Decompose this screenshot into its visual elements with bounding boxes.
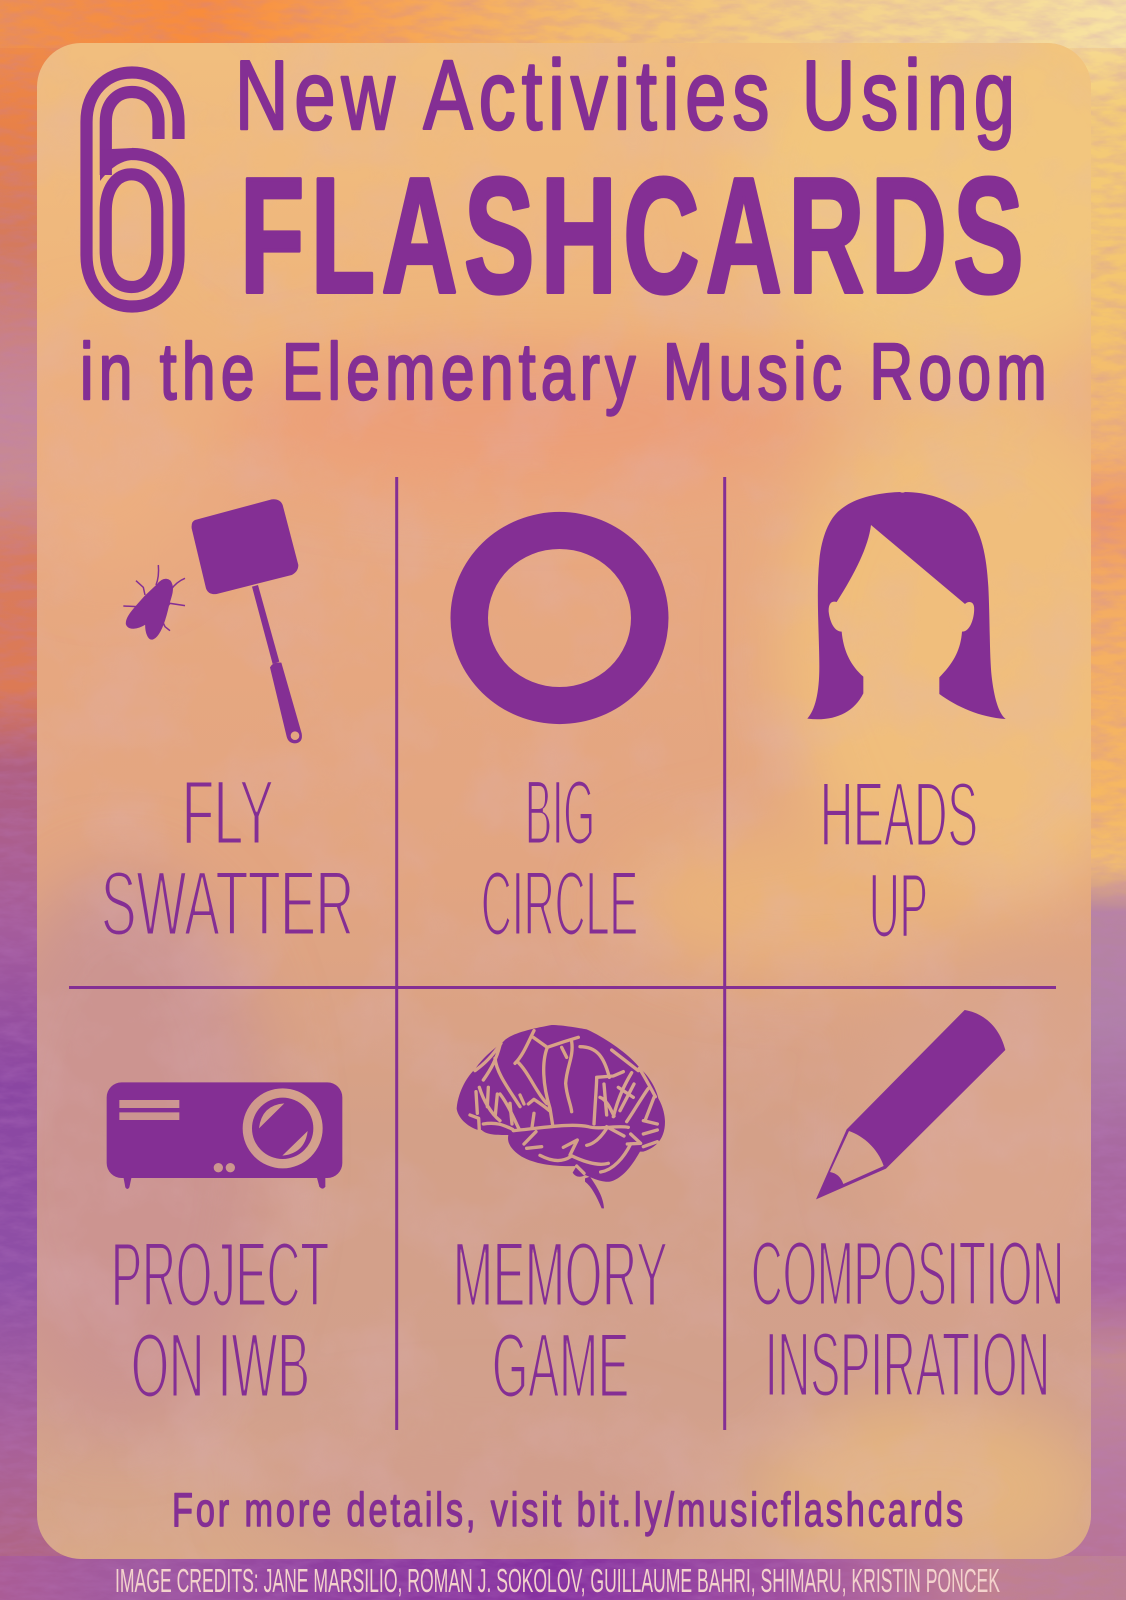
label: heads up <box>820 764 978 957</box>
text: CIRCLE <box>481 853 638 955</box>
label: big circle: BIG <box>525 762 595 864</box>
label: memory game: MEMORY <box>453 1224 668 1326</box>
icon: pencil <box>816 1010 1005 1199</box>
icon: head silhouette <box>807 492 1006 719</box>
icon: brain <box>457 1025 665 1208</box>
label: project on iwb <box>111 1224 329 1417</box>
label: composition inspiration <box>751 1223 1064 1416</box>
icon: big circle <box>450 512 669 724</box>
label: heads up: UP <box>869 855 928 957</box>
label: fly swatter: SWATTER <box>101 853 354 955</box>
heading numeral: 6 <box>86 72 178 306</box>
label: project on iwb: PROJECT <box>111 1224 329 1326</box>
grid dividers <box>69 477 1056 1430</box>
label: big circle <box>481 762 638 955</box>
label: memory game: GAME <box>492 1315 629 1417</box>
label: fly swatter: FLY <box>182 762 274 864</box>
icon: projector <box>107 1082 342 1189</box>
label: project on iwb: ON IWB <box>131 1315 310 1417</box>
label: memory game <box>453 1224 668 1417</box>
label: fly swatter <box>101 762 354 955</box>
icon: fly swatter and fly <box>123 499 302 743</box>
